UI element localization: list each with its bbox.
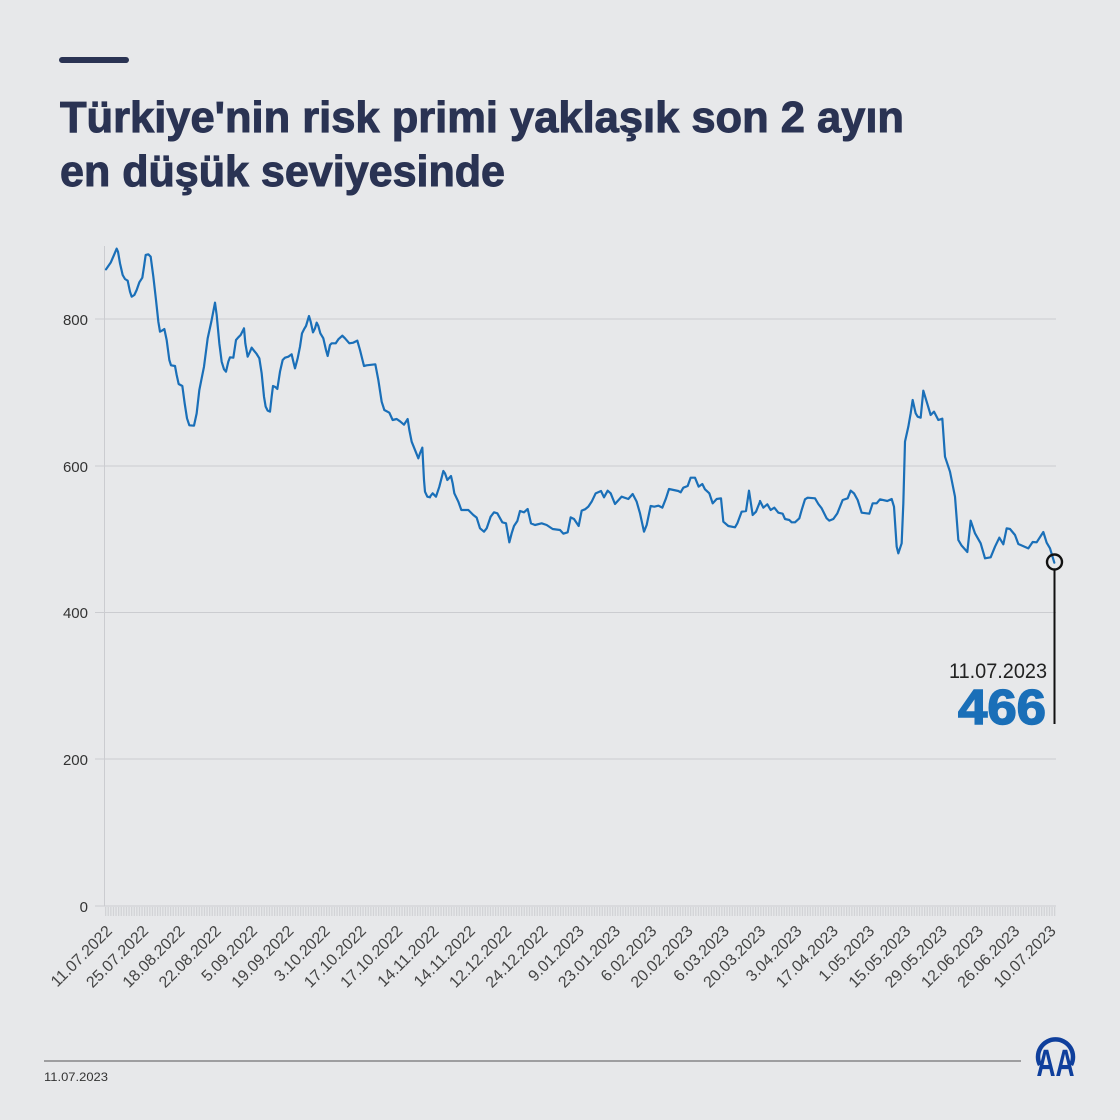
x axis date labels: 6.02.2023 [598,923,660,985]
x axis date labels: 3.04.2023 [743,923,806,985]
footer line [44,1060,1021,1062]
logo: Anadolu Agency [1036,1039,1074,1085]
x axis date labels: 11.07.2022 [48,923,116,991]
callout: last value: 466 [958,681,1046,735]
x axis date labels: 17.04.2023 [773,923,842,991]
title [60,93,904,196]
x axis date labels: 17.10.2022 [338,923,406,991]
x axis date labels: 20.02.2023 [628,923,697,991]
x axis date labels: 23.01.2023 [555,923,624,991]
x axis date labels: 1.05.2023 [816,923,878,985]
y axis labels: 200 [63,752,88,769]
y axis labels: 600 [63,459,88,476]
x axis date labels: 20.03.2023 [701,923,769,991]
x axis date labels: 6.03.2023 [671,923,733,985]
callout: last value: 11.07.2023 [949,660,1047,683]
y axis labels: 0 [80,899,88,916]
footer date: 11.07.2023 [44,1070,108,1084]
y axis labels [63,312,88,916]
x axis date labels [48,923,1060,991]
x axis date labels: 19.09.2022 [229,923,297,991]
y axis gridlines [95,246,1056,906]
y axis labels: 400 [63,605,88,622]
x axis date labels: 24.12.2022 [483,923,552,991]
y axis labels: 800 [63,312,88,329]
x axis date labels: 25.07.2022 [83,923,152,991]
title: en düşük seviyesinde [60,147,505,196]
line chart [48,246,1062,991]
x axis date labels: 9.01.2023 [525,923,588,985]
x axis tick marks [105,907,1056,916]
end point marker [1047,554,1062,724]
x axis date labels: 5.09.2022 [199,923,261,985]
x axis date labels: 12.06.2023 [918,923,987,991]
title accent bar [59,57,129,63]
x axis date labels: 12.12.2022 [446,923,515,991]
x axis date labels: 14.11.2022 [375,923,443,991]
callout: last value [949,660,1047,735]
x axis date labels: 22.08.2022 [156,923,225,991]
x axis date labels: 15.05.2023 [846,923,915,991]
x axis date labels: 3.10.2022 [271,923,334,985]
x axis date labels: 10.07.2023 [991,923,1060,991]
title: Türkiye'nin risk primi yaklaşık son 2 ayın [60,93,904,142]
logo: Anadolu Agency: AA [1036,1043,1074,1085]
x axis date labels: 18.08.2022 [120,923,189,991]
data line [106,249,1054,563]
x axis date labels: 17.10.2022 [301,923,370,991]
x axis date labels: 26.06.2023 [955,923,1023,991]
x axis date labels: 29.05.2023 [882,923,951,991]
x axis date labels: 14.11.2022 [411,923,479,991]
